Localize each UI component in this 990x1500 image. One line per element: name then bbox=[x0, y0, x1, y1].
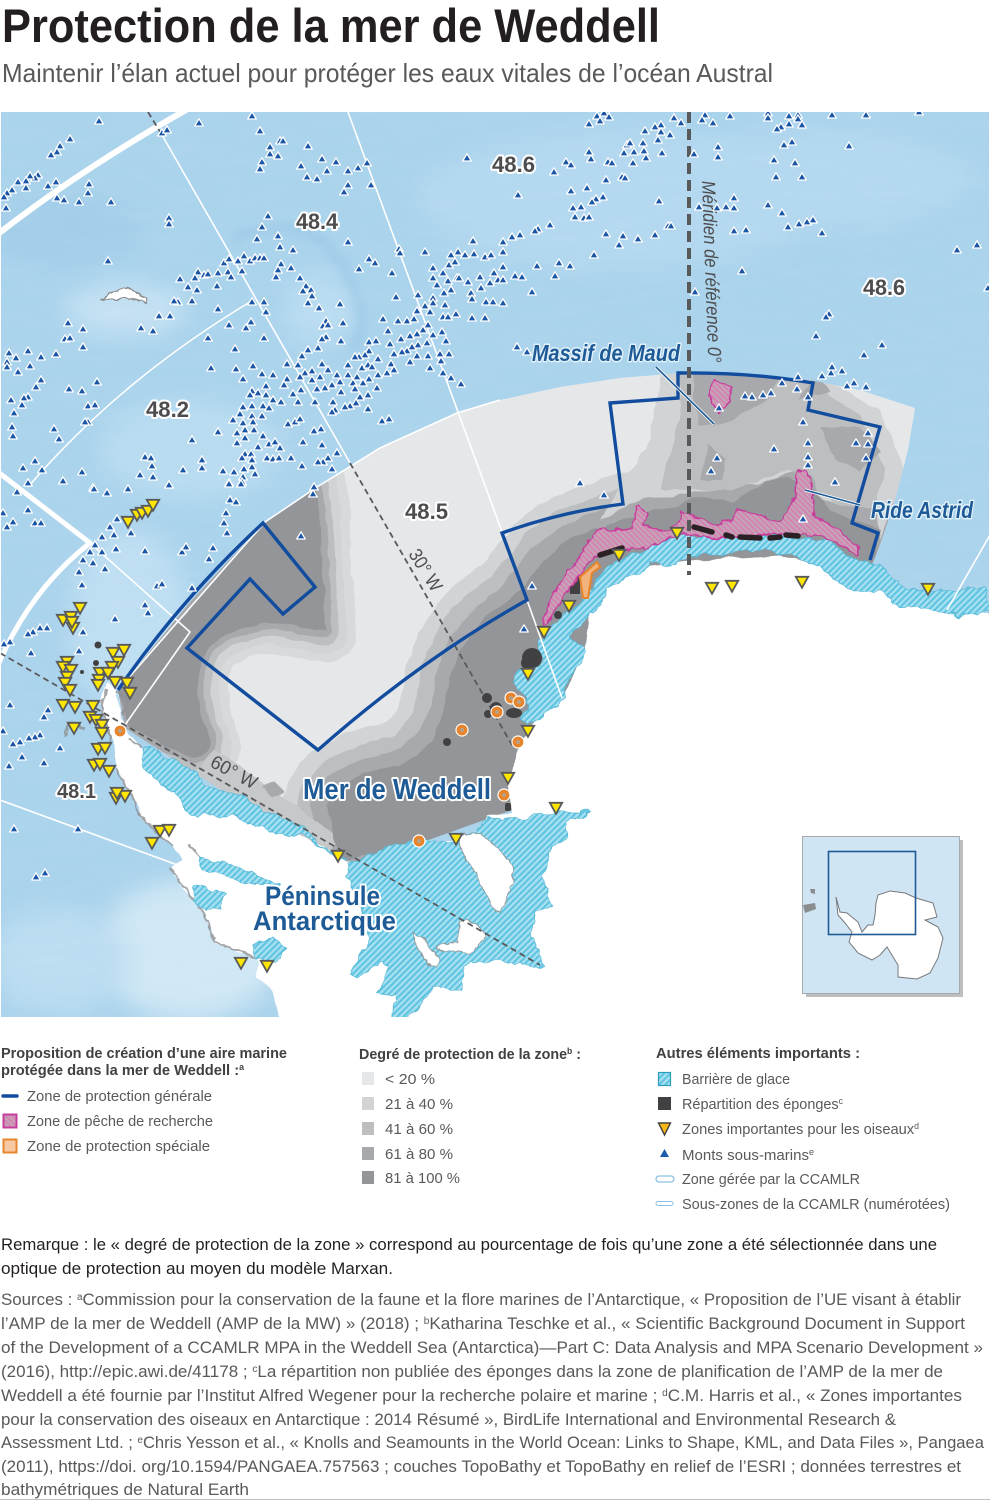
legend item: seamounts: Monts sous-marinse bbox=[682, 1147, 814, 1164]
meridian labels: 30° W bbox=[404, 546, 446, 596]
legend item: CCAMLR area: Zone gérée par la CCAMLR bbox=[682, 1171, 860, 1188]
legend: degree of protection bbox=[359, 1046, 581, 1187]
legend: proposal: protégée dans la mer de Weddell :a bbox=[1, 1062, 245, 1079]
note: optique de protection au moyen du modèle Marxan. bbox=[1, 1259, 393, 1278]
place labels bbox=[253, 340, 974, 936]
ocean background bbox=[0, 112, 990, 1020]
map border bbox=[0, 112, 990, 1018]
subarea labels: 48.1 bbox=[57, 781, 96, 803]
marine protected area boundary bbox=[118, 373, 880, 750]
subarea labels: 48.2 bbox=[146, 397, 189, 422]
sources: l’AMP de la mer de Weddell (AMP de la MW) » (2018) ; bKatharina Teschke et al., « Scientific Background Document in Support bbox=[1, 1314, 965, 1333]
legend item: general protection zone: Zone de protection générale bbox=[27, 1088, 212, 1105]
legend: other features bbox=[656, 1045, 950, 1213]
inset locator map bbox=[802, 836, 963, 997]
legend item: under 20 percent: < 20 % bbox=[385, 1071, 435, 1088]
legend: proposal: Proposition de création d’une aire marine bbox=[1, 1045, 287, 1062]
place labels: Massif de Maud bbox=[532, 340, 681, 366]
peninsula coastal islands bbox=[66, 690, 256, 958]
panel: map bbox=[0, 100, 990, 1040]
ice shelves bbox=[142, 534, 989, 1017]
place labels: Ride Astrid bbox=[871, 497, 974, 523]
note bbox=[1, 1235, 937, 1278]
meridian labels: Méridien de référence 0° bbox=[697, 180, 724, 363]
CCAMLR thin white boundaries bbox=[0, 112, 990, 867]
seamounts bbox=[3, 112, 988, 877]
sources: (2011), https://doi. org/10.1594/PANGAEA.757563 ; couches TopoBathy et TopoBathy en relief de l’ESRI ; données terrestres et bbox=[1, 1457, 961, 1476]
leader lines bbox=[656, 367, 860, 505]
colony markers bbox=[120, 698, 519, 841]
special protection zone bbox=[580, 562, 600, 598]
islands in ice shelf bbox=[413, 833, 513, 966]
legend item: bird areas: Zones importantes pour les oiseauxd bbox=[682, 1121, 919, 1138]
subarea labels: 48.4 bbox=[296, 209, 339, 234]
legend item: 41 to 60 percent: 41 à 60 % bbox=[385, 1121, 453, 1138]
sources: Weddell a été fournie par l’Institut Alfred Wegener pour la recherche polaire et marine ; dC.M. Harris et al., « Zones importantes bbox=[1, 1386, 962, 1405]
sponges bbox=[80, 573, 580, 811]
sources: (2016), http://epic.awi.de/41178 ; cLa répartition non publiée des éponges dans la zone de planification de l’AMP de la mer de bbox=[1, 1362, 943, 1381]
bird areas bbox=[63, 505, 928, 966]
subarea labels bbox=[57, 152, 905, 803]
legend item: under 20 percent bbox=[362, 1071, 435, 1088]
0 meridian dashed bbox=[687, 112, 691, 575]
place labels: Antarctique bbox=[253, 906, 396, 936]
meridian labels: 60° W bbox=[207, 752, 261, 794]
sponges along the shelf bbox=[600, 527, 798, 555]
subtitle: Maintenir l’élan actuel pour protéger les eaux vitales de l’océan Austral bbox=[2, 58, 773, 88]
land: Antarctica bbox=[100, 555, 990, 1040]
CCAMLR thick white boundaries bbox=[0, 110, 186, 665]
sources: bathymétriques de Natural Earth bbox=[1, 1480, 249, 1499]
sources: pour la conservation des oiseaux en Antarctique : 2014 Résumé », BirdLife International and Environmental Research & bbox=[1, 1410, 897, 1429]
sources: Assessment Ltd. ; eChris Yesson et al., « Knolls and Seamounts in the World Ocean: Links to Shape, KML, and Data Files », Pangaea bbox=[1, 1433, 985, 1452]
60 W dashed meridian bbox=[0, 653, 540, 965]
legend item: 81 to 100 percent: 81 à 100 % bbox=[385, 1170, 460, 1187]
zone edge white bbox=[118, 400, 500, 690]
sources bbox=[1, 1290, 985, 1499]
research fishing zone bbox=[542, 378, 860, 626]
sources: Sources : aCommission pour la conservation de la faune et la flore marines de l’Antarctique, « Proposition de l’UE visant à établir bbox=[1, 1290, 961, 1309]
legend item: special protection zone: Zone de protection spéciale bbox=[27, 1138, 210, 1155]
place labels: Mer de Weddell bbox=[303, 774, 491, 806]
subarea labels: 48.5 bbox=[405, 499, 448, 524]
legend item: CCAMLR subareas: Sous-zones de la CCAMLR (numérotées) bbox=[682, 1196, 950, 1213]
note: Remarque : le « degré de protection de la zone » correspond au pourcentage de fois qu’une zone a été sélectionnée dans une bbox=[1, 1235, 937, 1254]
sources: of the Development of a CCAMLR MPA in the Weddell Sea (Antarctica)—Part C: Data Analysis and MPA Scenario Development » bbox=[1, 1338, 983, 1357]
title: Protection de la mer de Weddell bbox=[2, 0, 660, 52]
legend item: sponges: Répartition des épongesc bbox=[682, 1096, 843, 1113]
meridian labels bbox=[207, 180, 724, 794]
legend item: 61 to 80 percent: 61 à 80 % bbox=[385, 1146, 453, 1163]
legend item: ice shelf: Barrière de glace bbox=[682, 1071, 790, 1088]
protection degree surface bbox=[118, 373, 915, 862]
legend: other features: Autres éléments importants : bbox=[656, 1045, 860, 1062]
30 W dashed meridian bbox=[148, 112, 512, 745]
legend: proposal bbox=[1, 1045, 287, 1155]
subarea labels: 48.6 bbox=[863, 275, 905, 300]
legend item: 21 to 40 percent: 21 à 40 % bbox=[385, 1096, 453, 1113]
icon: South Georgia island bbox=[102, 288, 146, 302]
legend item: research fishing zone: Zone de pêche de recherche bbox=[27, 1113, 213, 1130]
subarea labels: 48.6 bbox=[492, 152, 535, 177]
place labels: Péninsule bbox=[265, 881, 380, 911]
legend: degree of protection: Degré de protection de la zoneb : bbox=[359, 1046, 581, 1063]
